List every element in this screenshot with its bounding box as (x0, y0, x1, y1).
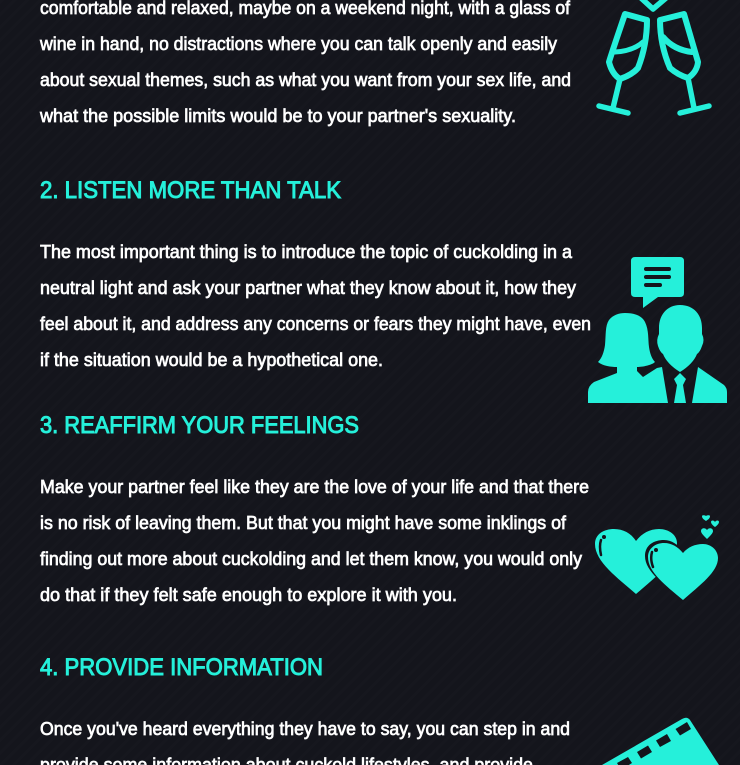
text block: section 4 body (40, 719, 570, 765)
text block: section 1 body: about sexual themes, such as what you want from your sex life, and (40, 70, 571, 90)
text block: section 1 body (39, 0, 571, 126)
text block: section 1 body: wine in hand, no distractions where you can talk openly and easily (39, 34, 557, 54)
icon part: speech bubble (631, 257, 684, 308)
heading: section 2: 2. LISTEN MORE THAN TALK (40, 177, 341, 204)
text block: section 3 body: is no risk of leaving them. But that you might have some inklings of (40, 513, 567, 533)
icon part: woman (588, 313, 668, 403)
text block: section 1 body: what the possible limits would be to your partner's sexuality. (39, 106, 516, 126)
icon part: tiny hearts (701, 515, 719, 539)
text block: section 2 body: neutral light and ask your partner what they know about it, how they (40, 278, 576, 298)
icon part: small heart outline (645, 540, 690, 600)
heading: section 3: 3. REAFFIRM YOUR FEELINGS (40, 412, 359, 439)
icon: champagne glasses (599, 0, 709, 113)
icon: couple talking (588, 257, 727, 403)
icon part: small heart (648, 543, 718, 600)
text block: section 2 body: The most important thing is to introduce the topic of cuckolding in a (40, 242, 573, 262)
text block: section 2 body: feel about it, and address any concerns or fears they might have, even (40, 314, 591, 334)
heading: section 4: 4. PROVIDE INFORMATION (40, 654, 323, 681)
text block: section 4 body: Once you've heard everything they have to say, you can step in and (40, 719, 570, 739)
text block: section 2 body: if the situation would be a hypothetical one. (40, 350, 383, 370)
icon: hearts (595, 515, 719, 600)
text block: section 3 body: finding out more about cuckolding and let them know, you would only (40, 549, 582, 569)
text block: section 2 body (40, 242, 591, 370)
text block: section 3 body (40, 477, 589, 605)
icon part: large heart (595, 529, 677, 594)
icon: film strip (602, 718, 719, 765)
text block: section 3 body: do that if they felt safe enough to explore it with you. (40, 585, 457, 605)
icon part: man (657, 305, 727, 403)
text block: section 3 body: Make your partner feel like they are the love of your life and that there (40, 477, 589, 497)
